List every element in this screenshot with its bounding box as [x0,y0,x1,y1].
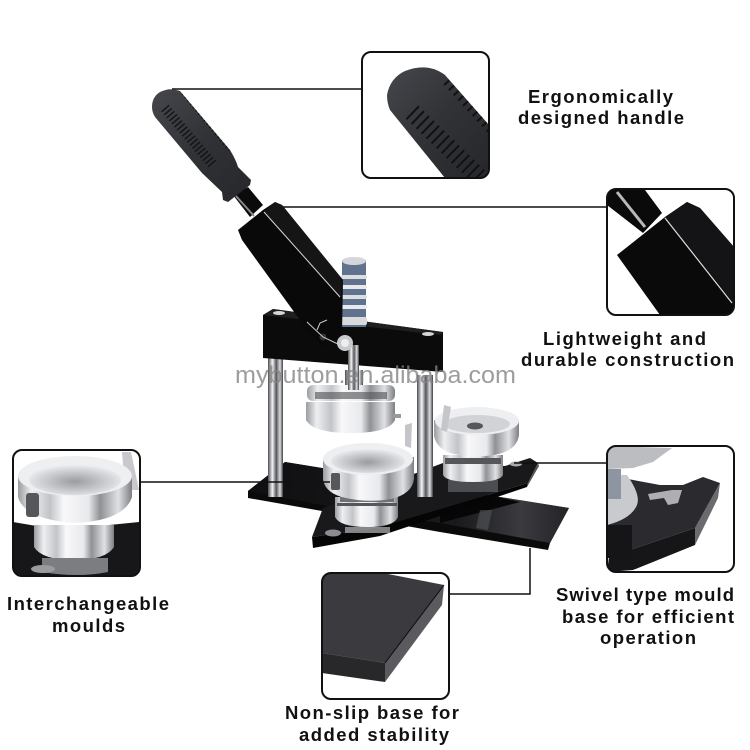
callout line: swivel base [514,462,608,464]
rubber handle [152,89,251,202]
label: swivel base: Swivel type mould [556,584,734,605]
right column [417,375,433,497]
label: non-slip base [285,702,459,745]
label: ergonomic handle: designed handle [518,107,684,128]
label: interchangeable moulds: moulds [52,615,125,636]
label: lightweight construction [521,328,734,370]
inset: non-slip base [322,573,449,699]
label: ergonomic handle [518,86,684,128]
right mould [434,405,519,492]
label: swivel base: base for efficient [562,606,734,627]
lower mould [323,423,414,533]
left column [268,358,283,497]
inset: ergonomic handle [362,52,490,180]
callout line: handle [172,88,362,90]
label: interchangeable moulds [7,593,169,636]
label: swivel base [556,584,734,648]
label: non-slip base: Non-slip base for [285,702,459,723]
button press machine [152,89,569,550]
callout line: construction [283,206,608,208]
label: lightweight construction: Lightweight and [543,328,706,349]
inset: swivel base [607,446,734,572]
label: ergonomic handle: Ergonomically [528,86,674,107]
upper mould [306,370,401,433]
screw and spring [341,257,367,390]
label: non-slip base: added stability [299,724,450,745]
label: interchangeable moulds: Interchangeable [7,593,169,614]
watermark: mybutton.en.alibaba.com [235,362,516,389]
callout line: non-slip base [447,548,530,594]
inset: interchangeable mould [13,450,140,576]
inset: lever construction [607,189,734,315]
top crossbar [263,309,443,372]
base plate: swivel board [312,458,539,548]
lever arm [233,187,343,347]
pivot pin [307,320,353,351]
label: swivel base: operation [600,627,696,648]
label: lightweight construction: durable construction [521,349,734,370]
callout line: interchangeable moulds [139,481,330,483]
base plate: long board [248,462,569,550]
